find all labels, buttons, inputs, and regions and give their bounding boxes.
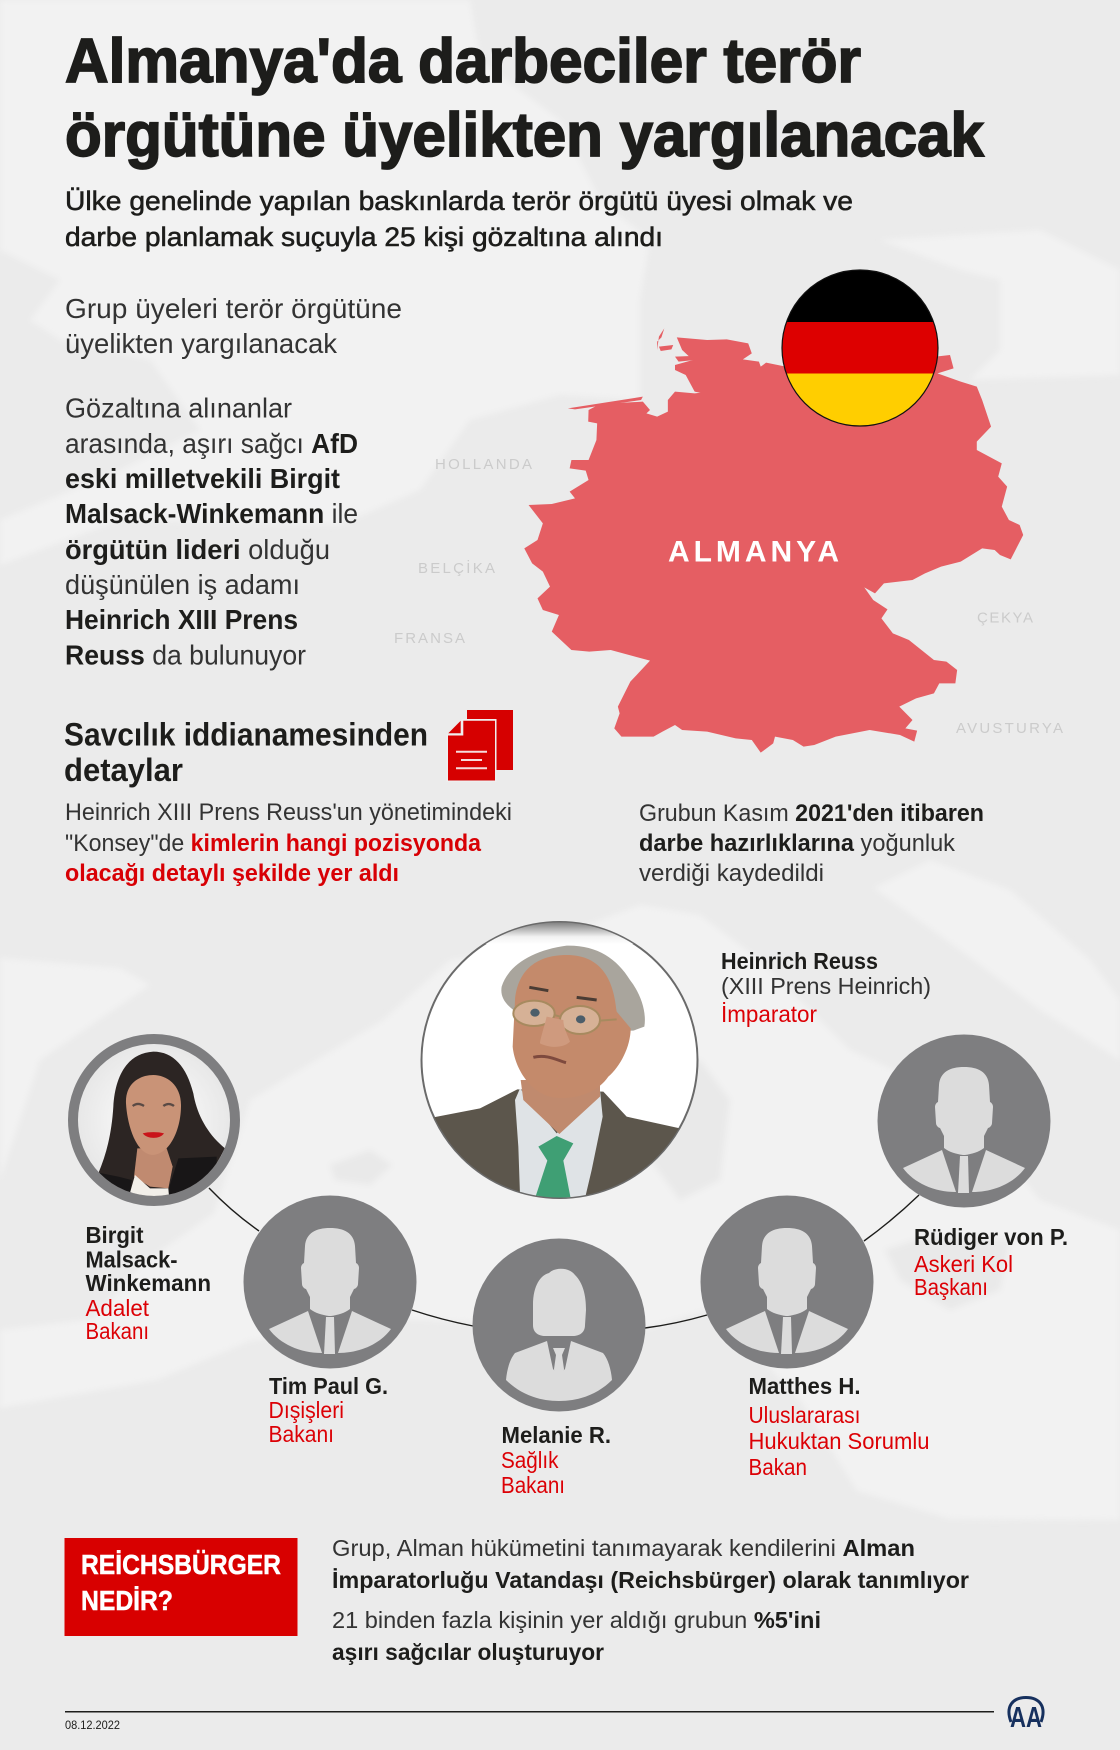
text block: Reichsbürger description: Grup, Alman hükümetini tanımayarak kendilerini Alman	[332, 1535, 915, 1561]
icon: Matthes H. silhouette	[700, 1196, 874, 1368]
name: Matthes H.	[748, 1373, 930, 1480]
icon: documents	[446, 710, 513, 782]
text block: Reichsbürger description: 21 binden fazla kişinin yer aldığı grubun %5'ini	[332, 1607, 821, 1633]
name: Heinrich Reuss: (XIII Prens Heinrich)	[721, 973, 931, 999]
name: Matthes H.: Bakan	[748, 1454, 807, 1480]
name: Heinrich Reuss: Heinrich Reuss	[721, 948, 878, 974]
text block: group members: Grup üyeleri terör örgütüne	[65, 293, 402, 324]
text block: group members: üyelikten yargılanacak	[65, 328, 337, 359]
country labels	[394, 456, 1063, 737]
name: Heinrich Reuss: İmparator	[721, 1001, 817, 1027]
country labels: HOLLANDA	[435, 456, 532, 473]
callout: Reichsbürger nedir: NEDİR?	[81, 1585, 173, 1616]
name: Birgit Malsack-Winkemann: Adalet	[86, 1295, 149, 1321]
map: Germany	[524, 328, 1023, 753]
text block: detainees: Malsack-Winkemann ile	[65, 498, 358, 529]
connector lines	[209, 1188, 919, 1328]
text block: council	[65, 799, 512, 887]
title: Almanya'da darbeciler terör	[65, 27, 861, 96]
text block: Reichsbürger description	[332, 1535, 969, 1665]
name: Melanie R.: Melanie R.	[502, 1422, 611, 1448]
text block: detainees: düşünülen iş adamı	[65, 569, 300, 600]
icon: Rüdiger von P. silhouette	[878, 1034, 1050, 1208]
name: Matthes H.: Matthes H.	[748, 1373, 860, 1399]
text block: Reichsbürger description: aşırı sağcılar oluşturuyor	[332, 1639, 604, 1665]
text block: detainees: arasında, aşırı sağcı AfD	[65, 428, 358, 459]
country labels: AVUSTURYA	[956, 720, 1063, 737]
name: Melanie R.	[501, 1422, 611, 1498]
country labels: FRANSA	[394, 630, 465, 647]
text block: detainees: eski milletvekili Birgit	[65, 463, 340, 494]
name: Melanie R.: Sağlık	[501, 1447, 559, 1473]
footer rule	[65, 1711, 994, 1712]
country labels: BELÇİKA	[418, 559, 495, 577]
icon: Melanie R. silhouette	[472, 1238, 646, 1412]
name: Rüdiger von P.: Başkanı	[914, 1274, 988, 1300]
text block: Reichsbürger description: İmparatorluğu Vatandaşı (Reichsbürger) olarak tanımlıyor	[332, 1567, 969, 1593]
text block: council: Heinrich XIII Prens Reuss'un yönetimindeki	[65, 799, 512, 826]
name: Birgit Malsack-Winkemann: Malsack-	[86, 1246, 178, 1272]
name: Birgit Malsack-Winkemann: Birgit	[86, 1222, 144, 1248]
name: Birgit Malsack-Winkemann	[86, 1222, 211, 1344]
portrait: Birgit Malsack-Winkemann	[73, 1039, 235, 1201]
text block: detainees: örgütün lideri olduğu	[65, 534, 330, 565]
name: Birgit Malsack-Winkemann: Bakanı	[86, 1318, 149, 1344]
text block: detainees: Heinrich XIII Prens	[65, 604, 298, 635]
name: Rüdiger von P.: Rüdiger von P.	[914, 1224, 1068, 1250]
heading: prosecutor details	[64, 716, 428, 788]
title: örgütüne üyelikten yargılanacak	[65, 101, 985, 170]
name: Heinrich Reuss	[721, 948, 931, 1027]
name: Rüdiger von P.	[914, 1224, 1068, 1300]
name: Matthes H.: Hukuktan Sorumlu	[748, 1428, 930, 1454]
name: Matthes H.: Uluslararası	[748, 1402, 860, 1428]
text block: council: "Konsey"de kimlerin hangi pozisyonda	[65, 830, 482, 857]
name: Tim Paul G.: Dışişleri	[268, 1397, 344, 1423]
portrait: Heinrich Reuss	[420, 920, 700, 1198]
name: Tim Paul G.: Tim Paul G.	[269, 1373, 388, 1399]
text block: coup preparations: verdiği kaydedildi	[639, 860, 824, 887]
logo: AA: AA	[1010, 1702, 1042, 1734]
subtitle	[65, 186, 853, 252]
text block: detainees	[65, 392, 358, 670]
country labels: ÇEKYA	[977, 610, 1033, 626]
text block: detainees: Gözaltına alınanlar	[65, 392, 292, 424]
text block: group members	[65, 293, 402, 359]
title	[65, 27, 985, 170]
subtitle: Ülke genelinde yapılan baskınlarda terör örgütü üyesi olmak ve	[65, 186, 853, 216]
text block: coup preparations: Grubun Kasım 2021'den itibaren	[639, 800, 984, 827]
callout: Reichsbürger nedir: REİCHSBÜRGER	[81, 1549, 281, 1580]
name: Rüdiger von P.: Askeri Kol	[914, 1251, 1013, 1277]
logo: AA	[1009, 1698, 1043, 1734]
name: Tim Paul G.	[268, 1373, 388, 1447]
text block: coup preparations: darbe hazırlıklarına yoğunluk	[639, 830, 956, 857]
name: Melanie R.: Bakanı	[501, 1472, 565, 1498]
callout: Reichsbürger nedir	[64, 1538, 298, 1636]
icon: German flag	[780, 268, 940, 428]
text block: council: olacağı detaylı şekilde yer aldı	[65, 860, 399, 887]
text block: coup preparations	[639, 800, 984, 887]
date: 08.12.2022	[65, 1718, 120, 1732]
subtitle: darbe planlamak suçuyla 25 kişi gözaltına alındı	[65, 222, 663, 252]
icon: Tim Paul G. silhouette	[244, 1196, 416, 1368]
text block: detainees: Reuss da bulunuyor	[65, 640, 306, 670]
heading: prosecutor details: detaylar	[64, 752, 183, 788]
heading: prosecutor details: Savcılık iddianamesinden	[64, 716, 428, 752]
map: Germany: ALMANYA	[668, 536, 839, 568]
name: Tim Paul G.: Bakanı	[268, 1421, 334, 1447]
name: Birgit Malsack-Winkemann: Winkemann	[86, 1270, 211, 1296]
